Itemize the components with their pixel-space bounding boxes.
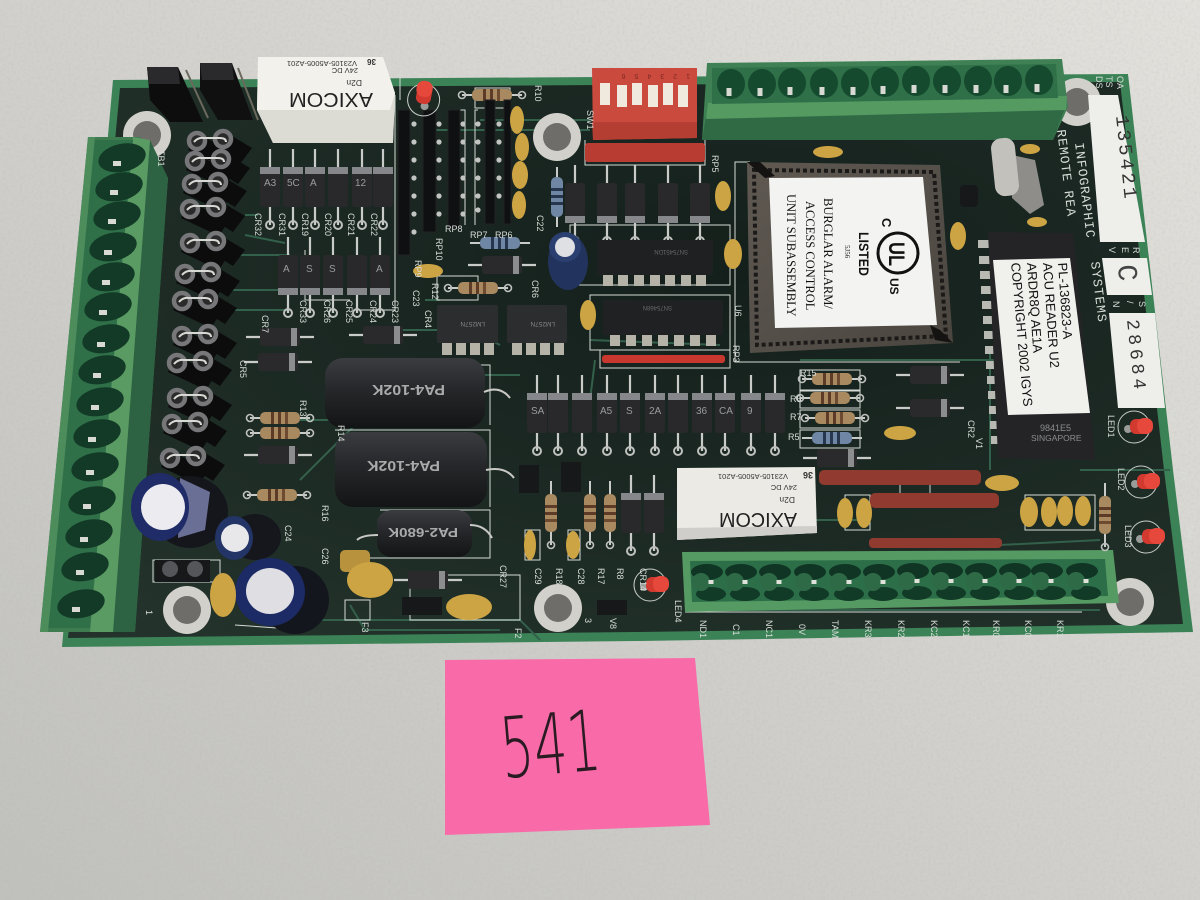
white serial label strips: 135421 bbox=[1110, 114, 1141, 203]
component reference silkscreen: V1 bbox=[974, 438, 984, 449]
component reference silkscreen: CR20 bbox=[323, 213, 333, 236]
component reference silkscreen: R7 bbox=[790, 412, 802, 422]
integrated circuits: SN75451DN bbox=[654, 248, 688, 254]
white serial label strips: 28684 bbox=[1121, 319, 1149, 394]
component reference silkscreen: CR24 bbox=[368, 300, 378, 323]
mounting holes bbox=[123, 78, 1154, 634]
relay: top white: V23105-A5005-A201 bbox=[287, 59, 357, 68]
label: UL listed: BURGLAR ALARM/ bbox=[821, 198, 835, 309]
label: UL listed: LISTED bbox=[856, 232, 872, 276]
bottom connector labels: TAM bbox=[830, 620, 840, 638]
board title silkscreen: REMOTE REA bbox=[1053, 129, 1079, 218]
relay: lower white: 24V DC bbox=[770, 483, 797, 492]
red resistor networks bbox=[585, 143, 1002, 548]
component reference silkscreen: CR2 bbox=[966, 420, 976, 438]
component reference silkscreen: R10 bbox=[533, 85, 543, 102]
silkscreen outlines bbox=[130, 70, 1095, 630]
board title silkscreen: E bbox=[1120, 247, 1130, 253]
diodes: centre row: S bbox=[626, 406, 633, 417]
bottom connector labels: KC2 bbox=[929, 620, 939, 638]
component reference silkscreen: RP5 bbox=[710, 155, 720, 173]
jumper pin rows bbox=[161, 130, 252, 485]
relay: lower white: V23105-A5005-A201 bbox=[718, 472, 788, 481]
board title silkscreen bbox=[1053, 76, 1147, 324]
yellow tantalum capacitors bbox=[210, 106, 1091, 620]
component reference silkscreen: CR25 bbox=[344, 300, 354, 323]
diodes: second row: S bbox=[329, 264, 336, 275]
component reference silkscreen: CR14 bbox=[638, 568, 648, 591]
label: UL listed: 5J56 bbox=[843, 245, 851, 259]
component reference silkscreen: U6 bbox=[733, 305, 743, 317]
bottom connector labels: KR0 bbox=[991, 620, 1001, 638]
board title silkscreen: S bbox=[1137, 301, 1147, 307]
component reference silkscreen: RX bbox=[1168, 410, 1178, 423]
bottom connector labels: KR1 bbox=[1055, 620, 1065, 638]
component reference silkscreen: DN bbox=[1185, 525, 1195, 538]
circuit board bbox=[62, 70, 1193, 647]
jumper blocks bbox=[147, 63, 258, 122]
relay: lower white: AXICOM bbox=[719, 508, 797, 530]
label: firmware: PL-136823-A bbox=[1055, 262, 1075, 340]
EPROM chip: SINGAPORE bbox=[1031, 433, 1082, 443]
label: UL listed: C bbox=[879, 218, 894, 228]
label: firmware: COPYRIGHT 2002 IGYS bbox=[1008, 262, 1036, 407]
bottom terminal block bbox=[682, 550, 1119, 612]
diodes: centre row: SA bbox=[531, 406, 545, 417]
component reference silkscreen: RP6 bbox=[495, 230, 513, 240]
component reference silkscreen: 3 bbox=[583, 618, 593, 623]
board title silkscreen: V bbox=[1107, 247, 1117, 253]
white serial label strips bbox=[1088, 95, 1165, 408]
component reference silkscreen: C22 bbox=[535, 215, 545, 232]
component reference silkscreen: CR27 bbox=[498, 565, 508, 588]
diodes: second row bbox=[278, 237, 390, 317]
component reference silkscreen: LED1 bbox=[1106, 415, 1116, 438]
small black components bbox=[155, 462, 627, 615]
bottom connector labels: KR3 bbox=[863, 620, 873, 638]
component reference silkscreen: CR21 bbox=[346, 213, 356, 236]
component reference silkscreen: R12 bbox=[430, 283, 440, 300]
component reference silkscreen: R5 bbox=[788, 432, 800, 442]
component reference silkscreen: CR6 bbox=[530, 280, 540, 298]
label: UL listed bbox=[769, 177, 937, 328]
component reference silkscreen: R13 bbox=[298, 400, 308, 417]
component reference silkscreen: RP3 bbox=[731, 345, 741, 363]
black resistor packs with pads bbox=[398, 100, 511, 255]
component reference silkscreen: CR26 bbox=[322, 300, 332, 323]
integrated circuits: SN75468N bbox=[643, 304, 672, 310]
top terminal block bbox=[702, 59, 1068, 140]
inductors: PA4-102K bbox=[367, 457, 440, 474]
component reference silkscreen: CR4 bbox=[423, 310, 433, 328]
component reference silkscreen: F3 bbox=[360, 622, 370, 633]
diodes: centre row: CA bbox=[719, 406, 733, 417]
component reference silkscreen: C24 bbox=[283, 525, 293, 542]
number 541: 541 bbox=[496, 692, 604, 798]
diodes: centre row: 2A bbox=[649, 406, 662, 417]
crystal bbox=[990, 137, 1044, 214]
bottom connector labels: NC1 bbox=[764, 620, 774, 638]
component reference silkscreen: C29 bbox=[533, 568, 543, 585]
white serial label strips: C bbox=[1109, 263, 1141, 282]
component reference silkscreen: R16 bbox=[320, 505, 330, 522]
bottom connector labels: KC1 bbox=[961, 620, 971, 638]
component reference silkscreen bbox=[144, 85, 1195, 639]
component reference silkscreen: CR23 bbox=[390, 300, 400, 323]
component reference silkscreen: LED2 bbox=[1116, 468, 1126, 491]
component reference silkscreen: R15 bbox=[800, 368, 817, 378]
board title silkscreen: / bbox=[1125, 301, 1135, 304]
resistors bbox=[244, 89, 1111, 555]
inductors: PA4-102K bbox=[372, 381, 445, 398]
component reference silkscreen: C26 bbox=[320, 548, 330, 565]
diodes: top row: A bbox=[310, 178, 317, 189]
label: UL listed: UL bbox=[884, 242, 909, 266]
component reference silkscreen: R17 bbox=[596, 568, 606, 585]
component reference silkscreen: RP10 bbox=[434, 238, 444, 261]
electrolytic capacitors bbox=[131, 232, 588, 634]
component reference silkscreen: R18 bbox=[554, 568, 564, 585]
inductors bbox=[325, 358, 514, 557]
diodes: centre row: A5 bbox=[600, 406, 613, 417]
board title silkscreen: R bbox=[1131, 247, 1141, 254]
label: UL listed: ACCESS CONTROL bbox=[803, 201, 817, 310]
component reference silkscreen: F2 bbox=[513, 628, 523, 639]
label: firmware: ACU READER U2 bbox=[1040, 262, 1062, 368]
diodes: top row: 5C bbox=[287, 178, 300, 189]
diodes: top row bbox=[260, 149, 393, 229]
left terminal block TB1 bbox=[40, 137, 168, 632]
component reference silkscreen: 1 bbox=[144, 610, 154, 615]
component reference silkscreen: CR7 bbox=[260, 315, 270, 333]
component reference silkscreen: RP7 bbox=[470, 230, 488, 240]
diodes: top row: A3 bbox=[264, 178, 277, 189]
relay: lower white: 36 bbox=[803, 470, 813, 480]
relay: lower white bbox=[677, 467, 817, 540]
component reference silkscreen: RP8 bbox=[445, 224, 463, 234]
board title silkscreen: DS bbox=[1094, 76, 1104, 89]
label: UL listed: US bbox=[887, 278, 901, 295]
component reference silkscreen: LED3 bbox=[1123, 525, 1133, 548]
component reference silkscreen: R6 bbox=[790, 394, 802, 404]
diodes: centre row: 36 bbox=[696, 406, 708, 417]
bottom connector labels: KR2 bbox=[896, 620, 906, 638]
bottom connector labels bbox=[698, 620, 1065, 638]
component reference silkscreen: CR5 bbox=[238, 360, 248, 378]
relay: lower white: D2n bbox=[779, 495, 795, 505]
bottom connector labels: ND1 bbox=[698, 620, 708, 638]
DIP switch: 123456 bbox=[613, 72, 690, 79]
PLCC socket chip bbox=[747, 162, 953, 353]
component reference silkscreen: SW1 bbox=[585, 110, 595, 130]
EPROM chip: 9841E5 bbox=[1040, 423, 1071, 433]
relay: top white: 24V DC bbox=[331, 66, 358, 75]
integrated circuits bbox=[437, 240, 723, 355]
component reference silkscreen: CR19 bbox=[300, 213, 310, 236]
relay: top white: 36 bbox=[367, 57, 376, 66]
component reference silkscreen: V8 bbox=[608, 618, 618, 629]
label: firmware bbox=[993, 258, 1090, 415]
horizontal diodes bbox=[244, 256, 964, 589]
relay: top white: AXICOM bbox=[289, 88, 373, 110]
bottom connector labels: KC0 bbox=[1023, 620, 1033, 638]
component reference silkscreen: RP9 bbox=[413, 260, 423, 278]
relay: top white: D2n bbox=[346, 78, 362, 88]
copper traces bbox=[130, 120, 1170, 640]
EPROM chip bbox=[978, 232, 1095, 460]
diodes: second row: S bbox=[306, 264, 313, 275]
component reference silkscreen: CR32 bbox=[253, 213, 263, 236]
component reference silkscreen: R14 bbox=[336, 425, 346, 442]
diodes: top row: 12 bbox=[355, 178, 367, 189]
board title silkscreen: INFOGRAPHIC bbox=[1071, 142, 1098, 240]
board title silkscreen: SYSTEMS bbox=[1087, 261, 1109, 324]
label: firmware: ARDR8Q AE1A bbox=[1024, 262, 1045, 354]
integrated circuits: LM257N bbox=[530, 320, 555, 327]
diodes: second row: A bbox=[283, 264, 290, 275]
component reference silkscreen: C28 bbox=[576, 568, 586, 585]
relay: top white bbox=[257, 57, 395, 143]
component reference silkscreen: LED4 bbox=[673, 600, 683, 623]
DIP switch bbox=[592, 68, 697, 140]
component reference silkscreen: R8 bbox=[615, 568, 625, 580]
diodes: upper centre row bbox=[565, 165, 710, 245]
component reference silkscreen: CR33 bbox=[298, 300, 308, 323]
integrated circuits: LM257N bbox=[460, 320, 485, 327]
small transistor bbox=[960, 185, 978, 207]
component reference silkscreen: CR22 bbox=[369, 213, 379, 236]
pink note with handwritten number bbox=[445, 658, 710, 835]
inductors: PA2-680K bbox=[387, 525, 458, 540]
diodes: centre row: 9 bbox=[747, 406, 753, 417]
component reference silkscreen: TB1 bbox=[156, 150, 166, 167]
bottom connector labels: C1 bbox=[731, 624, 741, 636]
bottom connector labels: 0V bbox=[797, 624, 807, 635]
board title silkscreen: TS bbox=[1104, 76, 1114, 88]
board title silkscreen: N bbox=[1111, 301, 1121, 308]
diodes: second row: A bbox=[376, 264, 383, 275]
component reference silkscreen: C23 bbox=[411, 290, 421, 307]
diodes: centre row bbox=[527, 375, 785, 455]
component reference silkscreen: CR31 bbox=[277, 213, 287, 236]
component reference silkscreen: TX bbox=[1178, 470, 1188, 482]
label: UL listed: UNIT SUBASSEMBLY bbox=[784, 194, 798, 316]
LEDs bbox=[405, 78, 1165, 601]
board title silkscreen: OA bbox=[1115, 76, 1125, 89]
